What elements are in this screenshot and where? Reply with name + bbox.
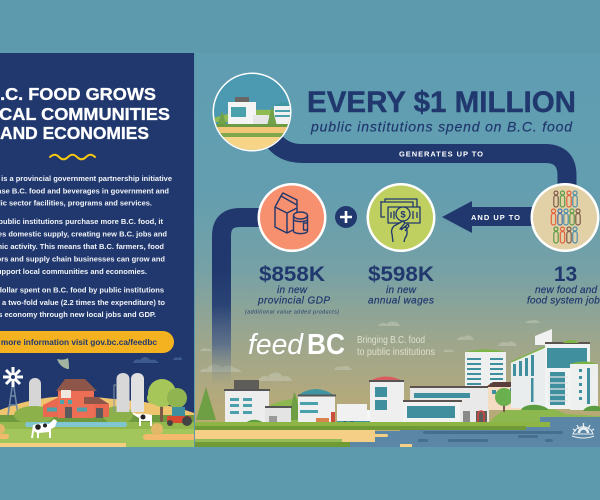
text block: introduction paragraphs <box>0 174 172 319</box>
building: office <box>224 380 292 422</box>
stat: jobs: 13 <box>554 263 577 286</box>
title: EVERY $1 MILLION <box>307 86 576 119</box>
stat: wages <box>368 263 434 306</box>
subtitle: public institutions spend on B.C. food <box>310 118 573 134</box>
stat: wages: in new <box>386 285 417 296</box>
stat: GDP: in new <box>277 285 308 296</box>
logo: feed BC: feed <box>248 329 304 361</box>
tagline: to public institutions <box>357 347 435 358</box>
building: residences <box>486 382 522 410</box>
buildings: towers <box>511 329 598 410</box>
icon: plus sign <box>335 206 357 228</box>
silo left <box>29 378 41 406</box>
clouds <box>200 320 540 381</box>
truck and crates <box>316 404 370 422</box>
callout: more information link <box>0 331 174 353</box>
stat: jobs: new food and <box>535 285 597 296</box>
heading: B.C. food grows local communities and economies: AND ECONOMIES <box>0 123 149 143</box>
hills <box>270 398 600 424</box>
bottom teal margin <box>0 447 600 500</box>
silos right <box>114 373 144 412</box>
illustration: farm scene <box>0 357 203 447</box>
building: domed <box>297 389 336 422</box>
ground <box>195 422 550 427</box>
building: long low <box>403 386 489 423</box>
illustration: city scene <box>195 329 600 447</box>
bushes <box>247 404 600 422</box>
arrow: ribbon from GDP circle fading downward <box>222 218 270 385</box>
stat: jobs <box>527 263 600 306</box>
arrow: generates up to ribbon: GENERATES UP TO <box>399 150 483 158</box>
arrow: generates up to ribbon <box>272 138 567 192</box>
icon: hand holding money circle <box>366 183 436 252</box>
tractor <box>167 407 192 426</box>
icon: hand holding money circle: $ <box>400 210 406 220</box>
stat: GDP: provincial GDP <box>257 296 330 306</box>
cows <box>31 412 152 438</box>
icon: milk carton and can circle <box>258 183 326 252</box>
arrow: and up to: AND UP TO <box>471 213 520 222</box>
yellow wave divider <box>50 155 95 159</box>
river <box>350 417 600 447</box>
panel: left introduction <box>0 53 203 447</box>
heading: B.C. food grows local communities and economies <box>0 88 170 140</box>
icon: institution building circle <box>212 72 292 152</box>
tree round <box>495 388 511 412</box>
logo: feed BC <box>248 329 345 361</box>
stat: GDP: $858K <box>259 263 325 286</box>
building: tall left <box>465 350 506 388</box>
tagline: Bringing B.C. food <box>357 335 425 346</box>
stat: wages: annual wages <box>368 296 434 306</box>
stat: GDP <box>245 263 339 316</box>
ground strips <box>0 429 194 447</box>
panel: right economic impact <box>195 53 600 447</box>
tagline <box>357 335 435 358</box>
logo: feed BC: BC <box>307 329 345 361</box>
bushes <box>14 406 54 422</box>
building: red roof <box>369 376 404 422</box>
tree <box>147 379 187 422</box>
stat: GDP: (additional value added products) <box>245 310 339 316</box>
arrow: and up to <box>442 201 537 233</box>
windmill <box>3 367 23 415</box>
icon: jobs people circle <box>530 183 600 252</box>
pond <box>25 422 127 427</box>
trees <box>196 387 302 420</box>
stat: wages: $598K <box>368 263 434 286</box>
barn <box>43 379 109 418</box>
logo: Government of B.C. sun <box>572 423 594 438</box>
